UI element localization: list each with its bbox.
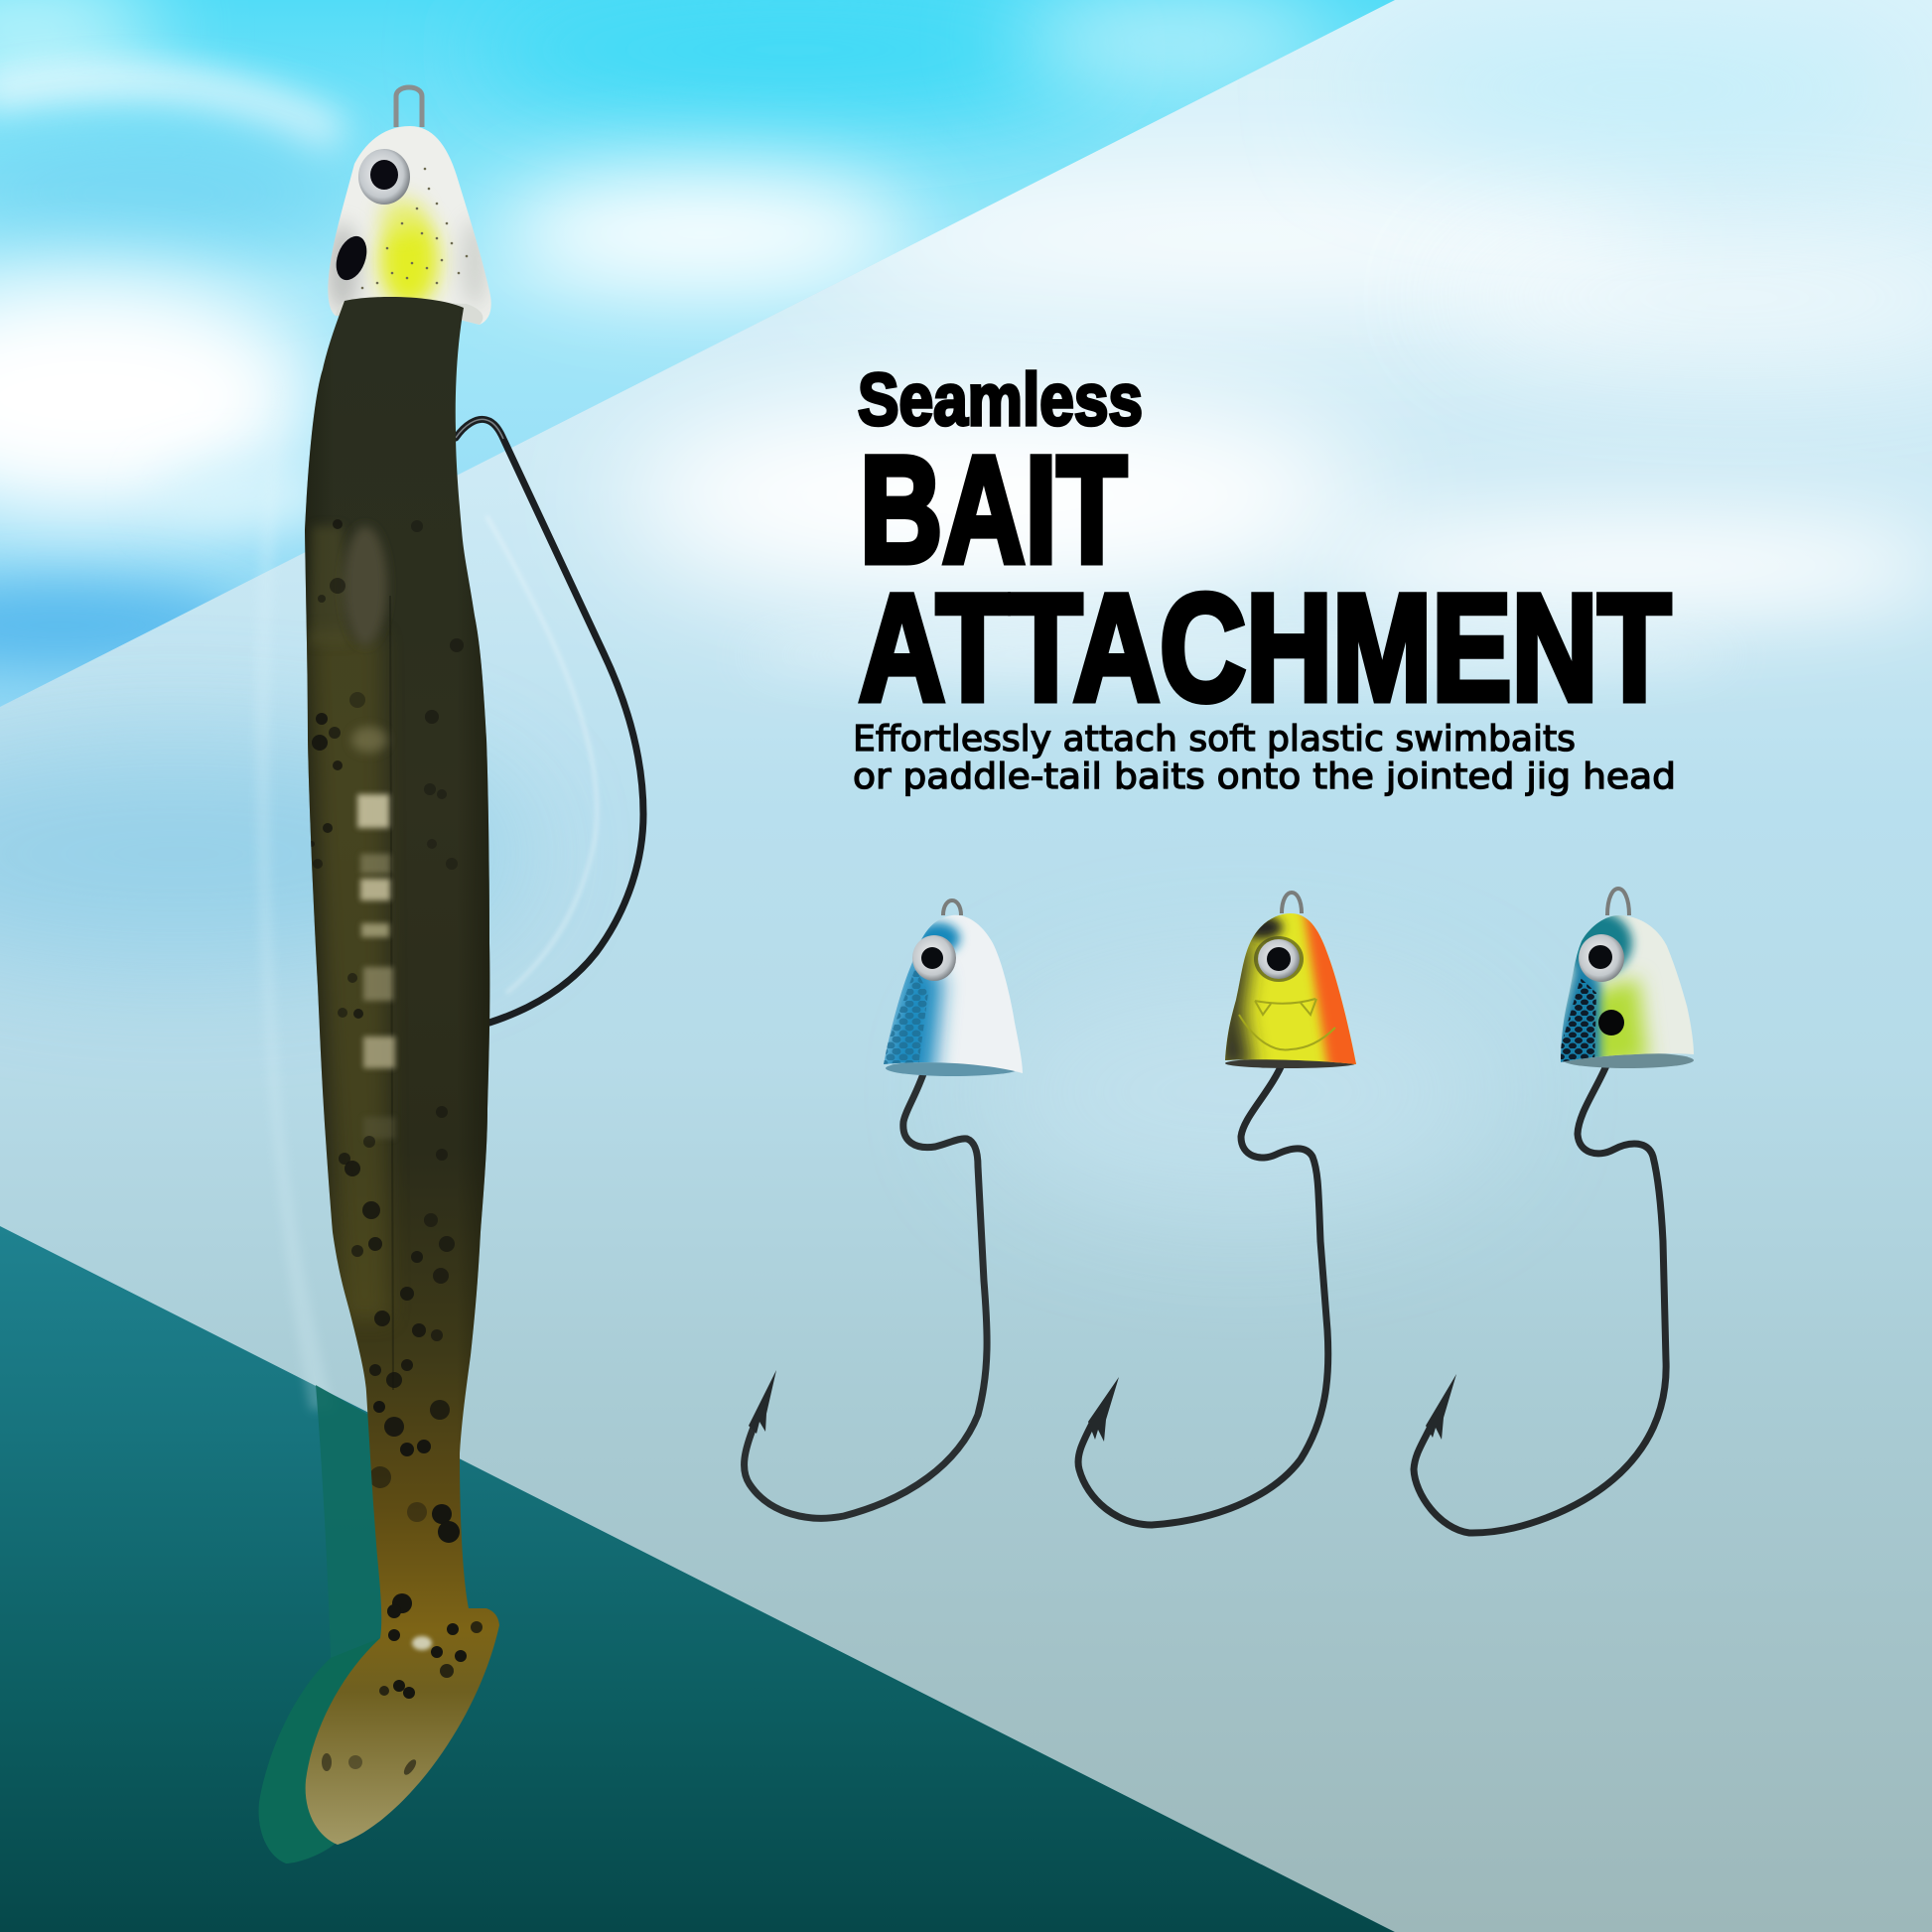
hook 3 head (1561, 915, 1694, 1068)
headline word: ATTACHMENT: ATTACHMENT (859, 563, 1671, 733)
bait hook wire (456, 419, 643, 1023)
reflection: faint ghost of bait (255, 338, 597, 1863)
subtitle (853, 719, 1676, 797)
hook 3 eye (1579, 934, 1624, 982)
bait body (298, 297, 499, 1845)
hook 3 spot (1598, 1010, 1624, 1035)
bait jig head (327, 126, 491, 325)
body shading and highlights (305, 365, 490, 1775)
jig head and hook 2: yellow and orange (1078, 893, 1370, 1525)
headline (858, 358, 1671, 733)
hook 1 head (874, 915, 1023, 1082)
subtitle line 1: Effortlessly attach soft plastic swimbaits (853, 719, 1576, 759)
hook 2 eye (1254, 936, 1304, 982)
bait head rim (336, 300, 483, 325)
jig head and hook 3: green and white (1414, 889, 1694, 1533)
hook 2 head (1225, 913, 1356, 1068)
hook 1 eye (912, 935, 956, 981)
bait head eye (358, 149, 410, 205)
background: dark teal wedge (0, 1226, 1395, 1932)
soft plastic swimbait with jig head (298, 87, 499, 1845)
subtitle line 2: or paddle-tail baits onto the jointed jig head (853, 757, 1676, 797)
hook 3 loop (1607, 889, 1629, 915)
hook 2 wire (1078, 1060, 1328, 1525)
headline word: Seamless: Seamless (858, 358, 1143, 441)
hook 1 wire (745, 1062, 987, 1518)
jig head and hook 1: blue and white (745, 900, 1023, 1518)
bait head spot (331, 232, 372, 284)
hook 2 loop (1282, 893, 1302, 913)
headline word: BAIT: BAIT (860, 425, 1127, 595)
background: upper cyan water panel (0, 0, 1395, 707)
hook 2 smile (1239, 999, 1335, 1050)
bait head loop eye (396, 87, 422, 127)
body speckles (309, 519, 483, 1777)
hook 1 loop (943, 900, 961, 915)
hook 3 wire (1414, 1056, 1666, 1533)
